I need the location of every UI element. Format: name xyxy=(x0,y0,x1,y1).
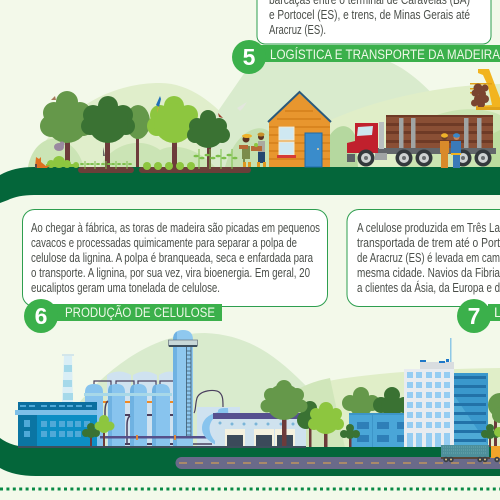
heading: step 6: PRODUÇÃO DE CELULOSE xyxy=(65,305,215,320)
text box: step 6: celulose da lignina. A polpa é branqueada, seca e enfardada para xyxy=(31,251,313,265)
logger worker 2 xyxy=(451,133,461,168)
spherical tank xyxy=(202,408,230,446)
text box: step 6: o transporte. A lignina, por sua vez, vira bioenergia. Em geral, 20 xyxy=(31,266,310,280)
container truck xyxy=(441,445,500,462)
heading: step 5: 5 xyxy=(243,44,256,70)
house xyxy=(268,92,331,167)
planting bed left xyxy=(78,161,134,173)
blue glass tower xyxy=(454,373,488,448)
tree 2 xyxy=(81,96,135,167)
text box: step 6: Ao chegar à fábrica, as toras de madeira são picadas em pequenos xyxy=(31,221,320,235)
worker with crate 1 xyxy=(239,134,252,167)
icon: small bird on tree xyxy=(51,96,56,100)
text box: step 6 xyxy=(22,210,328,306)
chimney xyxy=(62,354,74,402)
top dark green ribbon xyxy=(0,167,500,203)
warehouse xyxy=(213,413,307,447)
icon: white bird xyxy=(237,102,247,111)
heading: step 5 xyxy=(232,40,500,74)
icon: fox xyxy=(35,157,50,168)
small dark tree by factory xyxy=(82,423,100,448)
icon: sloth xyxy=(54,142,64,151)
icon: red bird xyxy=(218,113,223,118)
truck with logs xyxy=(347,115,496,166)
planting bed right xyxy=(139,149,251,173)
heading: step 7: 7 xyxy=(468,303,480,329)
crane with logs xyxy=(470,69,500,110)
heading: step 7 xyxy=(457,299,500,333)
heading: step 6 xyxy=(24,299,222,333)
white office tower xyxy=(404,338,454,448)
trees behind teal building xyxy=(342,387,412,417)
text box: step 7 xyxy=(347,210,500,306)
tree 3 xyxy=(126,105,150,167)
teal building xyxy=(349,413,405,448)
small tree by teal building xyxy=(340,424,360,448)
green bush xyxy=(46,156,79,168)
background hills: lower scene xyxy=(78,333,500,448)
background hills: upper scene xyxy=(28,62,500,167)
bottom dark green ground with road xyxy=(0,438,500,476)
text box: step 5 xyxy=(257,0,491,44)
tree 4 xyxy=(147,96,198,167)
small light tree by factory xyxy=(94,415,114,448)
tree 1 xyxy=(40,91,93,167)
big green tree xyxy=(260,380,323,448)
icon: blue macaw xyxy=(156,96,161,113)
tree 5 xyxy=(187,110,230,167)
text box: step 5: Aracruz (ES). xyxy=(269,23,326,37)
pulp mill: storage tanks and column xyxy=(84,330,240,446)
logger worker 1 xyxy=(440,133,449,168)
icon: woodpecker xyxy=(103,147,105,156)
text box: step 6: eucaliptos geram uma tonelada de celulose. xyxy=(31,281,220,295)
tree at right edge xyxy=(481,393,500,448)
worker with crate 2 xyxy=(251,132,266,167)
text box: step 6: cavacos e processadas quimicamente para separar a polpa de xyxy=(31,236,297,250)
blue factory building xyxy=(15,402,97,447)
heading: step 6: 6 xyxy=(35,303,47,329)
light green tree xyxy=(308,402,344,448)
